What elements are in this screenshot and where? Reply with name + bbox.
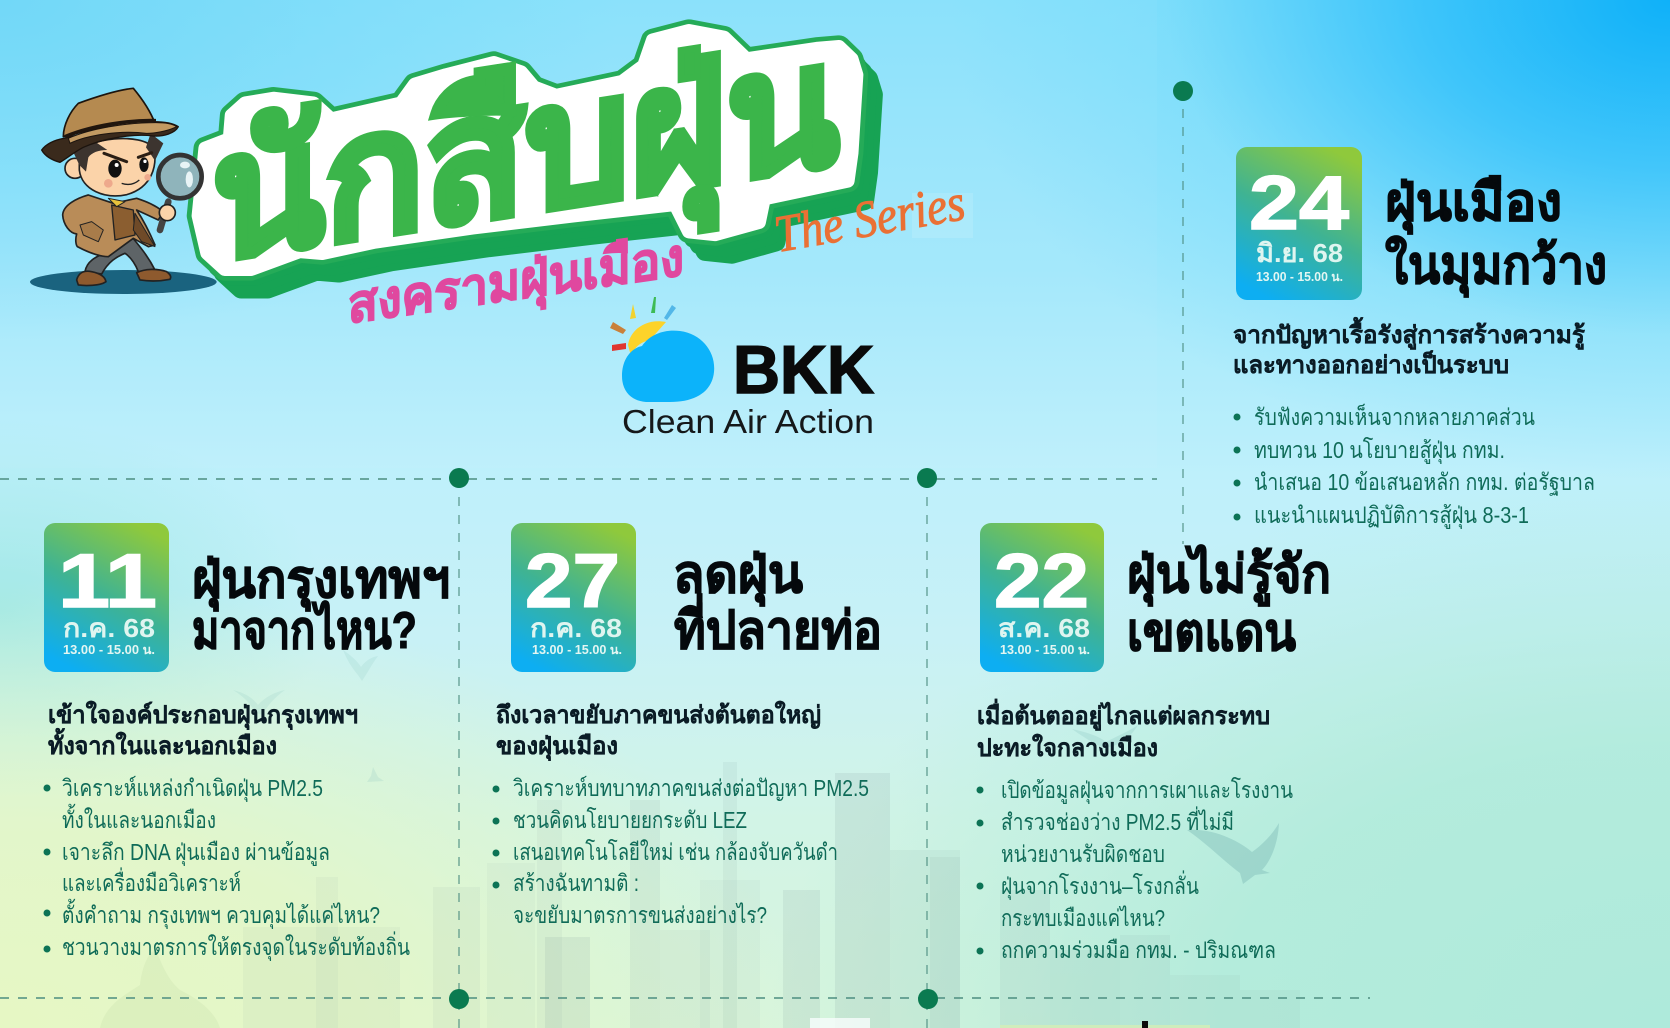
image patch tint xyxy=(0,0,1157,468)
subheading: เมื่อต้นตออยู่ไกลแต่ผลกระทบ xyxy=(977,698,1270,731)
date badge 27 xyxy=(511,523,636,672)
heading: ในมุมกว้าง xyxy=(1385,235,1607,298)
title: นักสืบฝุ่น: นักสืบฝุ่น xyxy=(212,6,839,307)
bullet list: แนะนำแผนปฏิบัติการสู้ฝุ่น 8-3-1 xyxy=(1254,502,1529,529)
logo: BKK Clean Air Action: Clean Air Action xyxy=(622,403,874,440)
date badge 24: 24 xyxy=(1249,161,1349,246)
bullet list: เสนอเทคโนโลยีใหม่ เช่น กล้องจับควันดำ xyxy=(513,839,838,865)
bullet list: สำรวจช่องว่าง PM2.5 ที่ไม่มี xyxy=(1001,806,1234,835)
bullet list: และเครื่องมือวิเคราะห์ xyxy=(62,867,241,896)
bullet list: เปิดข้อมูลฝุ่นจากการเผาและโรงงาน xyxy=(1001,777,1293,804)
subheading: ทั้งจากในและนอกเมือง xyxy=(48,727,277,760)
heading: ลดฝุ่น xyxy=(673,546,803,607)
bullet list: สร้างฉันทามติ : xyxy=(513,870,639,896)
date badge 22: 13.00 - 15.00 น. xyxy=(1000,643,1090,657)
panel: 27 ก.ค. 68 xyxy=(492,523,882,928)
tree silhouette xyxy=(100,950,220,1028)
heading: ที่ปลายท่อ xyxy=(674,594,882,660)
The Series script: The Series xyxy=(770,174,969,264)
bullet list: ฝุ่นจากโรงงาน–โรงกลั่น xyxy=(1001,870,1199,900)
bullet list: ถกความร่วมมือ กทม. - ปริมณฑล xyxy=(1001,937,1276,963)
date badge 27: 27 xyxy=(525,539,620,624)
bullet list xyxy=(976,777,1293,963)
bullet list: ตั้งคำถาม กรุงเทพฯ ควบคุมได้แค่ไหน? xyxy=(62,899,380,929)
date badge 27: 13.00 - 15.00 น. xyxy=(532,643,622,657)
date badge 24 xyxy=(1236,147,1362,300)
bullet list: จะขยับมาตรการขนส่งอย่างไร? xyxy=(513,902,767,928)
detective mascot xyxy=(30,88,217,294)
bullet list: ทบทวน 10 นโยบายสู้ฝุ่น กทม. xyxy=(1254,437,1505,464)
panel: 24 มิ.ย. 68 xyxy=(1233,147,1607,529)
date badge 11 xyxy=(44,523,169,672)
subheading: เข้าใจองค์ประกอบฝุ่นกรุงเทพฯ xyxy=(48,700,358,731)
bullet list: รับฟังความเห็นจากหลายภาคส่วน xyxy=(1254,402,1535,430)
bullet list: นำเสนอ 10 ข้อเสนอหลัก กทม. ต่อรัฐบาล xyxy=(1254,469,1595,496)
heading xyxy=(1127,544,1331,662)
date badge 24: 13.00 - 15.00 น. xyxy=(1256,270,1343,284)
heading xyxy=(1385,174,1607,298)
date badge 22 xyxy=(980,523,1104,672)
heading xyxy=(192,551,450,660)
subheading xyxy=(496,700,821,762)
heading: ฝุ่นไม่รู้จัก xyxy=(1127,544,1331,607)
subtitle: สงครามฝุ่นเมือง: สงครามฝุ่นเมือง xyxy=(348,229,684,338)
birds xyxy=(233,650,1279,884)
city skyline silhouette xyxy=(243,762,1300,1028)
date badge 11: ก.ค. 68 xyxy=(63,613,155,643)
subheading xyxy=(1233,316,1585,379)
bullet list: หน่วยงานรับผิดชอบ xyxy=(1001,841,1165,867)
bullet list: วิเคราะห์แหล่งกำเนิดฝุ่น PM2.5 xyxy=(62,775,323,802)
date badge 22: ส.ค. 68 xyxy=(998,613,1090,643)
bullet list: กระทบเมืองแค่ไหน? xyxy=(1001,905,1165,931)
subheading: ถึงเวลาขยับภาคขนส่งต้นตอใหญ่ xyxy=(496,700,821,729)
subheading: และทางออกอย่างเป็นระบบ xyxy=(1233,350,1509,379)
heading xyxy=(673,546,882,660)
subheading xyxy=(977,698,1270,762)
subheading: ของฝุ่นเมือง xyxy=(496,733,618,762)
date badge 24: มิ.ย. 68 xyxy=(1256,238,1343,268)
heading: มาจากไหน? xyxy=(192,600,417,660)
subheading: ปะทะใจกลางเมือง xyxy=(977,733,1158,762)
heading: เขตแดน xyxy=(1127,604,1296,662)
bullet list xyxy=(44,775,410,961)
dashed connector lines xyxy=(0,91,1370,1028)
cut-off black mark at bottom edge xyxy=(1142,1021,1148,1028)
heading: ฝุ่นเมือง xyxy=(1385,174,1562,235)
heading: ฝุ่นกรุงเทพฯ xyxy=(192,551,450,612)
bullet list: ทั้งในและนอกเมือง xyxy=(62,804,216,833)
date badge 27: ก.ค. 68 xyxy=(530,613,622,643)
bullet list: เจาะลึก DNA ฝุ่นเมือง ผ่านข้อมูล xyxy=(62,839,330,866)
logo: BKK Clean Air Action: BKK xyxy=(733,332,874,408)
subheading: จากปัญหาเรื้อรังสู่การสร้างความรู้ xyxy=(1233,316,1585,350)
subheading xyxy=(48,700,358,760)
panel: 22 ส.ค. 68 xyxy=(976,523,1331,963)
bullet list xyxy=(1234,402,1595,529)
bullet list xyxy=(492,775,869,928)
timeline nodes xyxy=(449,81,1193,1009)
date badge 22: 22 xyxy=(994,539,1089,624)
bullet list: วิเคราะห์บทบาทภาคขนส่งต่อปัญหา PM2.5 xyxy=(513,775,869,801)
logo: BKK Clean Air Action xyxy=(610,297,874,440)
bullet list: ชวนวางมาตรการให้ตรงจุดในระดับท้องถิ่น xyxy=(62,931,410,961)
bullet list: ชวนคิดนโยบายยกระดับ LEZ xyxy=(513,807,747,833)
date badge 11: 13.00 - 15.00 น. xyxy=(63,643,155,657)
panel: 11 ก.ค. 68 xyxy=(44,523,450,961)
date badge 11: 11 xyxy=(58,539,157,624)
